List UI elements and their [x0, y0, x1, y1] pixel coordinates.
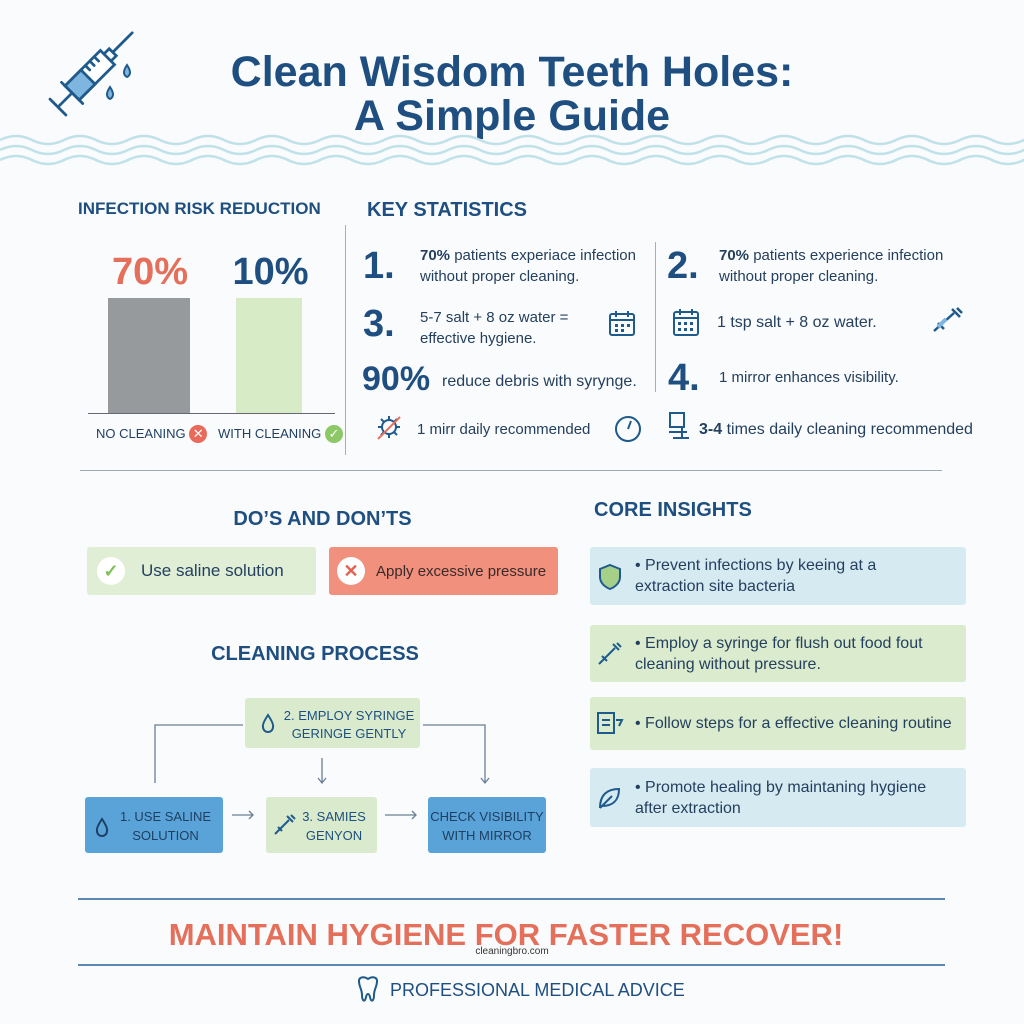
step 4 — [428, 797, 546, 853]
bar: no cleaning: 70% — [112, 251, 188, 293]
icon: syringe with drops — [48, 31, 134, 116]
insight 1: • Prevent infections by keeing at a — [635, 557, 876, 574]
labels: ✕ — [193, 426, 204, 441]
heading: INFECTION RISK REDUCTION — [78, 199, 321, 218]
bar: no cleaning — [108, 251, 190, 413]
panel: cleaning process — [85, 643, 546, 853]
insight 2: cleaning without pressure. — [635, 656, 821, 673]
stat 90% — [362, 360, 637, 398]
step 3: 3. SAMIES — [302, 809, 366, 824]
bar: with cleaning — [232, 251, 309, 413]
insight 3: • Follow steps for a effective cleaning routine — [635, 715, 952, 732]
insight 4 — [590, 768, 966, 827]
panel: key statistics: 5-7 salt + 8 oz water = — [420, 309, 568, 326]
dont box — [329, 547, 558, 595]
panel: key statistics: 1 tsp salt + 8 oz water. — [717, 314, 877, 331]
stat: 3-4 times — [669, 412, 973, 439]
panel: key statistics: 1 mirror enhances visibility. — [719, 369, 899, 386]
step 2 — [245, 698, 420, 748]
dont box: ✕ — [343, 561, 359, 581]
labels: NO CLEANING — [96, 426, 186, 441]
insight 4: • Promote healing by maintaning hygiene — [635, 779, 926, 796]
title: Clean Wisdom Teeth Holes: — [231, 48, 793, 96]
panel: key statistics: 70% patients experiace infection — [420, 247, 636, 264]
do box: ✓ — [103, 561, 119, 581]
panel: key statistics: without proper cleaning. — [719, 268, 878, 285]
insight 1: extraction site bacteria — [635, 578, 795, 595]
icon: syringe small — [933, 307, 963, 332]
stat 4 — [668, 357, 899, 399]
panel: key statistics: 4. — [668, 357, 700, 399]
heading: CLEANING PROCESS — [211, 643, 419, 665]
insight 4: after extraction — [635, 800, 741, 817]
stat 1 — [363, 245, 636, 287]
step 1 — [85, 797, 223, 853]
panel: key statistics: reduce debris with syrynge. — [442, 373, 637, 390]
panel: key statistics: 70% patients experience infection — [719, 247, 943, 264]
stat: 3-4 times: 3-4 times daily cleaning recommended — [699, 421, 973, 438]
panel: key statistics: 1. — [363, 245, 395, 287]
panel: key statistics: effective hygiene. — [420, 330, 536, 347]
step 1: 1. USE SALINE — [120, 809, 211, 824]
step 3 — [266, 797, 377, 853]
panel: infection risk reduction — [78, 199, 343, 443]
title — [231, 48, 793, 140]
step 4: CHECK VISIBILITY — [430, 809, 544, 824]
panel: key statistics — [362, 199, 973, 442]
panel: infection risk reduction: WITH CLEANING — [218, 426, 321, 441]
insight 2 — [590, 625, 966, 682]
do box — [87, 547, 316, 595]
icon: calendar — [609, 311, 635, 336]
footer — [358, 976, 685, 1002]
step 2: GERINGE GENTLY — [292, 726, 406, 741]
panel: dos and donts — [87, 508, 558, 595]
watermark: cleaningbro.com — [475, 946, 549, 957]
heading: CORE INSIGHTS — [594, 499, 752, 521]
banner: call to action: MAINTAIN HYGIENE FOR FASTER RECOVER! — [169, 917, 843, 952]
heading: DO’S AND DON’TS — [233, 508, 412, 530]
bar: with cleaning: 10% — [232, 251, 309, 293]
insight 1 — [590, 547, 966, 605]
heading: KEY STATISTICS — [367, 199, 527, 221]
step 2: 2. EMPLOY SYRINGE — [284, 708, 414, 723]
do box: Use saline solution — [141, 561, 284, 580]
panel: key statistics: 2. — [667, 245, 699, 287]
panel: key statistics: 90% — [362, 360, 430, 398]
stat: 1 tsp — [673, 307, 963, 336]
panel: key statistics: 3. — [363, 303, 395, 345]
dont box: Apply excessive pressure — [376, 563, 546, 580]
step 4: WITH MIRROR — [442, 828, 532, 843]
stat 3 — [363, 303, 635, 347]
panel: core insights — [590, 499, 966, 827]
labels — [96, 425, 207, 443]
title: A Simple Guide — [354, 92, 670, 140]
step 3: GENYON — [306, 828, 362, 843]
footer: PROFESSIONAL MEDICAL ADVICE — [390, 980, 685, 1000]
insight 3 — [590, 697, 966, 750]
insight 2: • Employ a syringe for flush out food fout — [635, 635, 923, 652]
stat: daily — [377, 416, 641, 442]
panel: infection risk reduction: ✓ — [328, 426, 339, 441]
stat 2 — [667, 245, 943, 287]
step 1: SOLUTION — [132, 828, 199, 843]
panel: key statistics: without proper cleaning. — [420, 268, 579, 285]
stat: daily: 1 mirr daily recommended — [417, 421, 590, 438]
